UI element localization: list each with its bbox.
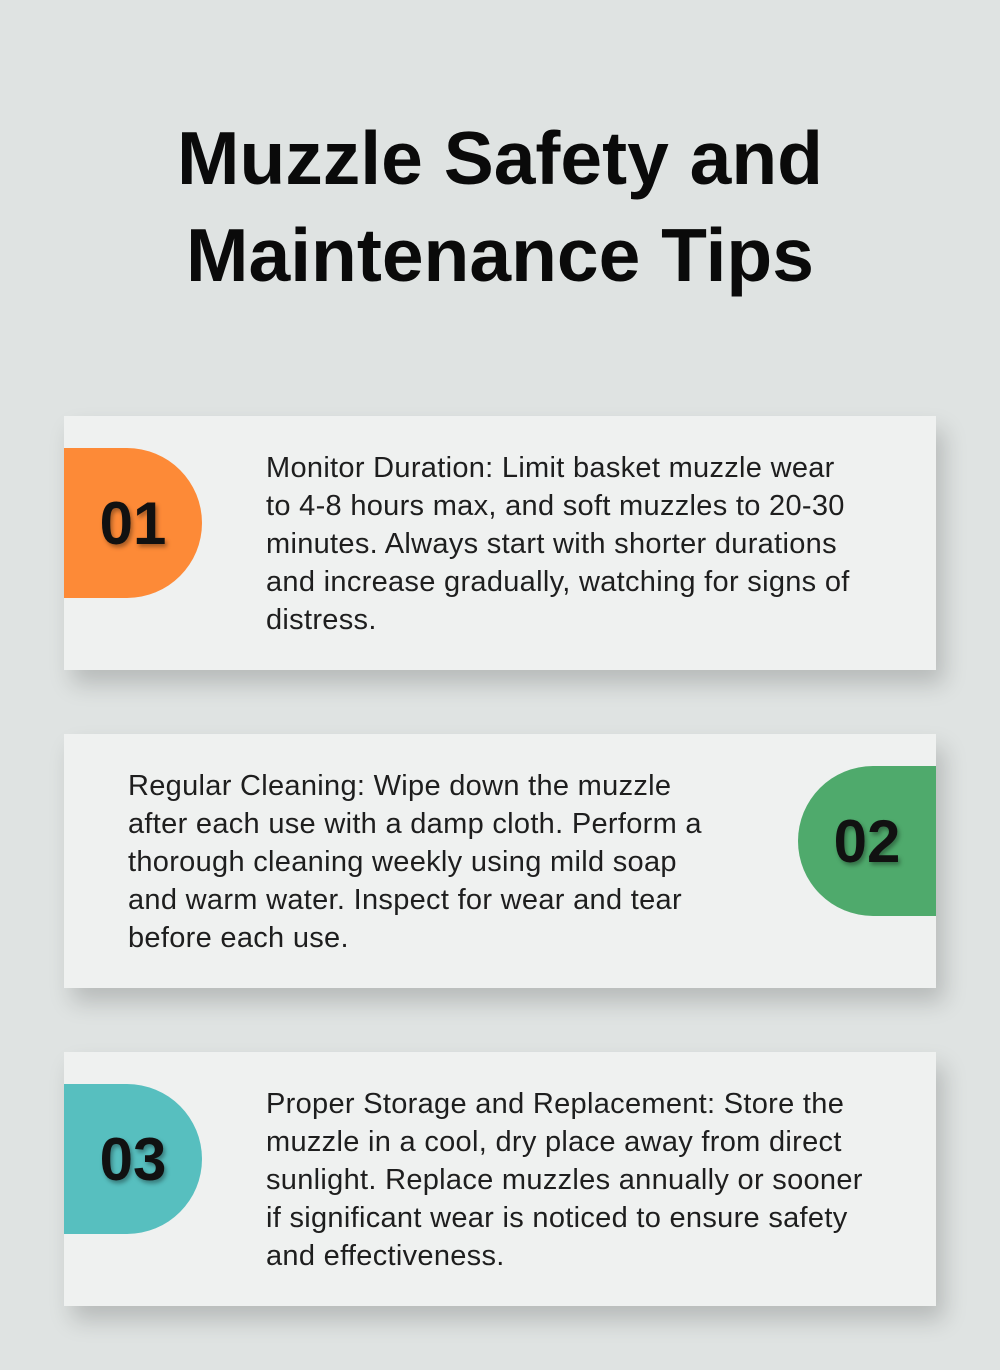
text: storage and replacement: Proper Storage and Replacement: Store the bbox=[266, 1088, 844, 1120]
panel: tip 01 bbox=[64, 416, 936, 670]
text: storage and replacement bbox=[266, 1088, 863, 1272]
panel: tip 02 bbox=[64, 734, 936, 988]
badge: 03 bbox=[64, 1084, 202, 1234]
text: storage and replacement: and effectiveness. bbox=[266, 1240, 505, 1272]
badge: 01: 01 bbox=[100, 490, 166, 556]
text: regular cleaning: and warm water. Inspect for wear and tear bbox=[128, 884, 682, 916]
text: monitor duration: and increase gradually, watching for signs of bbox=[266, 566, 850, 598]
title bbox=[177, 116, 823, 297]
panel: tip 03 bbox=[64, 1052, 936, 1306]
badge: 02: 02 bbox=[834, 808, 900, 874]
text: monitor duration bbox=[266, 452, 850, 636]
text: monitor duration: distress. bbox=[266, 604, 377, 636]
text: regular cleaning: before each use. bbox=[128, 922, 349, 954]
title: Maintenance Tips bbox=[186, 213, 814, 297]
text: monitor duration: minutes. Always start with shorter durations bbox=[266, 528, 837, 560]
text: monitor duration: Monitor Duration: Limit basket muzzle wear bbox=[266, 452, 835, 484]
text: storage and replacement: muzzle in a cool, dry place away from direct bbox=[266, 1126, 842, 1158]
title: Muzzle Safety and bbox=[177, 116, 823, 200]
text: regular cleaning: thorough cleaning weekly using mild soap bbox=[128, 846, 677, 878]
text: monitor duration: to 4-8 hours max, and soft muzzles to 20-30 bbox=[266, 490, 845, 522]
badge: 02 bbox=[798, 766, 936, 916]
text: regular cleaning bbox=[128, 770, 702, 954]
text: storage and replacement: if significant wear is noticed to ensure safety bbox=[266, 1202, 848, 1234]
text: regular cleaning: Regular Cleaning: Wipe down the muzzle bbox=[128, 770, 671, 802]
text: regular cleaning: after each use with a damp cloth. Perform a bbox=[128, 808, 702, 840]
badge: 01 bbox=[64, 448, 202, 598]
text: storage and replacement: sunlight. Replace muzzles annually or sooner bbox=[266, 1164, 863, 1196]
badge: 03: 03 bbox=[100, 1126, 166, 1192]
